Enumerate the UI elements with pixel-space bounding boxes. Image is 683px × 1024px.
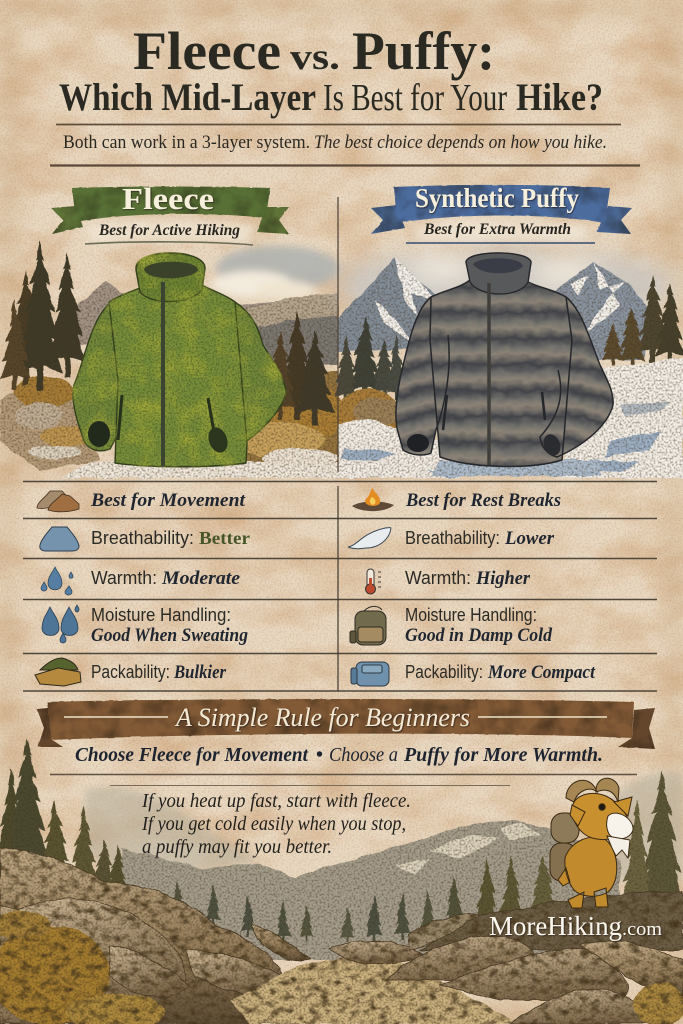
row: moisture handling good when sweating: Moisture Handling:: [91, 605, 231, 625]
goat white muzzle: [607, 813, 633, 839]
title: Puffy:: [352, 21, 495, 81]
row: moisture handling good in damp cold: Good in Damp Cold: [405, 625, 552, 646]
goat beard: [607, 836, 630, 858]
landscape: rocky trail valley with mountains and forest: [0, 738, 683, 1024]
title: Which Mid-Layer: [59, 76, 316, 119]
icon: thermometer: [366, 569, 381, 594]
morehiking.com logo: MoreHiking: [489, 911, 622, 941]
rule summary line: Choose Fleece for Movement: [75, 744, 309, 766]
row: warmth moderate: [41, 567, 241, 595]
puffy banner: [371, 183, 632, 243]
title: vs.: [290, 37, 340, 78]
rule summary line: [75, 744, 603, 766]
row: breathability lower: [348, 528, 555, 549]
row: packability bulkier: [35, 658, 227, 686]
row: breathability lower: Lower: [504, 528, 555, 549]
row: breathability better: Breathability:: [91, 528, 194, 548]
row: best for movement: [37, 490, 246, 512]
goat eye: [599, 804, 605, 810]
goat head: [572, 793, 630, 840]
brown ribbon: a simple rule for beginners: [37, 699, 655, 749]
beginner advice note: a puffy may fit you better.: [142, 836, 332, 858]
goat ears: [570, 797, 632, 826]
title: Is Best for Your: [323, 77, 507, 119]
row: warmth higher: Warmth:: [405, 568, 471, 588]
row: warmth higher: [366, 568, 531, 594]
goat horns: [566, 778, 619, 802]
puffy banner: Best for Extra Warmth: [423, 221, 571, 238]
row: breathability lower: Breathability:: [405, 528, 500, 548]
fleece banner: [51, 181, 289, 245]
backpack lower: [550, 843, 576, 881]
row: warmth moderate: Moderate: [161, 568, 241, 589]
puffy jacket: [395, 252, 614, 468]
icon: feather: [348, 528, 391, 549]
puffy banner: Synthetic Puffy: [415, 183, 579, 213]
goat mascot with backpack: [550, 778, 633, 908]
row: packability more compact: More Compact: [487, 662, 596, 683]
icon: campfire: [352, 488, 394, 511]
fleece jacket: [73, 253, 286, 467]
subtitle: [63, 132, 607, 153]
title: Hike?: [516, 76, 603, 119]
icon: compact blue pack: [351, 662, 389, 686]
backpack roll: [551, 813, 579, 843]
row: moisture handling good when sweating: [42, 605, 248, 646]
icon: large water drops: [42, 605, 79, 643]
subtitle: The best choice depends on how you hike.: [314, 132, 607, 153]
row: best for rest breaks: Best for Rest Breaks: [405, 490, 561, 511]
row: moisture handling good when sweating: Good When Sweating: [91, 625, 248, 646]
fleece banner: Best for Active Hiking: [98, 222, 240, 239]
row: moisture handling good in damp cold: Moisture Handling:: [405, 605, 537, 625]
comparison table: [23, 482, 657, 691]
fleece vs puffy divider: [337, 197, 339, 472]
rule summary line: •: [316, 744, 323, 766]
row: packability bulkier: Packability:: [91, 662, 170, 682]
beginner advice note: If you get cold easily when you stop,: [141, 813, 406, 835]
row: warmth moderate: Warmth:: [91, 568, 157, 588]
brown ribbon: a simple rule for beginners: A Simple Rule for Beginners: [174, 703, 470, 732]
illustration: fleece scene with forest and mountains: [0, 240, 344, 478]
icon: water drops: [41, 567, 73, 595]
title: Fleece: [133, 21, 281, 81]
icon: hiking shoes: [37, 491, 79, 512]
rule summary line: Puffy for More Warmth.: [403, 744, 603, 766]
icon: breathable dome: [40, 527, 79, 551]
beginner advice note: [141, 790, 411, 858]
subtitle: Both can work in a 3-layer system.: [63, 132, 310, 153]
morehiking.com logo: .com: [622, 919, 662, 940]
illustration: puffy scene with snowy mountains: [334, 247, 683, 478]
title: [59, 21, 603, 119]
icon: bundled fleece: [35, 658, 81, 686]
row: warmth higher: Higher: [475, 568, 531, 589]
beginner advice note: If you heat up fast, start with fleece.: [141, 790, 411, 812]
rule summary line: Choose a: [329, 744, 398, 766]
icon: backpack: [350, 606, 386, 645]
row: moisture handling good in damp cold: [350, 605, 552, 646]
row: packability more compact: Packability:: [405, 662, 483, 682]
row: packability bulkier: Bulkier: [173, 662, 227, 683]
row: packability more compact: [351, 662, 596, 686]
goat body and legs: [558, 837, 617, 908]
row: breathability better: Better: [199, 528, 250, 548]
row: best for movement: Best for Movement: [90, 490, 246, 511]
fleece banner: Fleece: [122, 181, 214, 216]
row: breathability better: [40, 527, 250, 551]
row: best for rest breaks: [352, 488, 561, 511]
